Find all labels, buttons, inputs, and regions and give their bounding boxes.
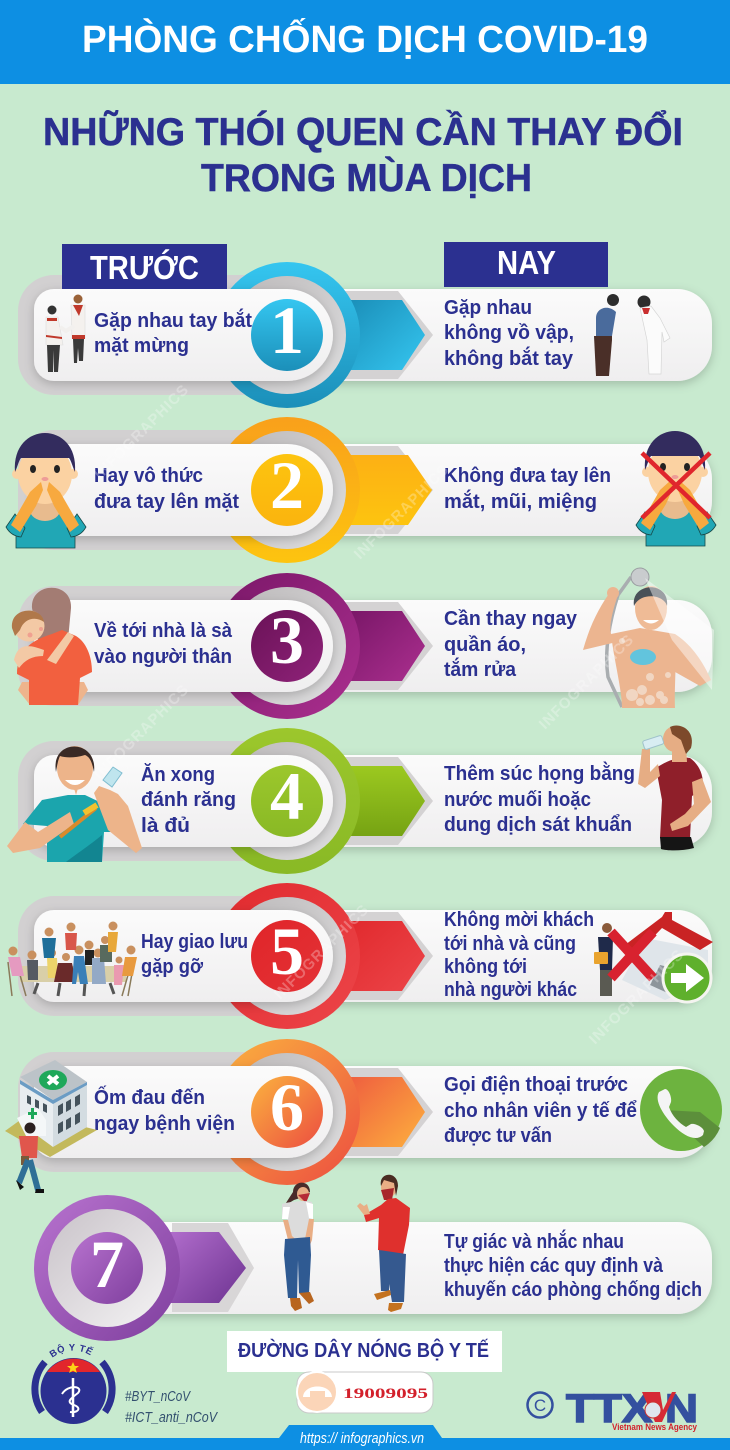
text: INFOGRAPHICS xyxy=(91,381,193,483)
text: row 1 now: không bắt tay xyxy=(444,346,574,370)
text: row 3 before: vào người thân xyxy=(94,646,232,668)
panel: row 2: 2 xyxy=(270,447,304,523)
hotline label: ĐƯỜNG DÂY NÓNG BỘ Y TẾ xyxy=(238,1338,489,1362)
text: row 1 before: mặt mừng xyxy=(94,335,189,357)
text: row 5 now: nhà người khác xyxy=(444,979,577,1001)
panel: row 7 xyxy=(34,1195,712,1341)
text: row 5 before: gặp gỡ xyxy=(141,956,204,978)
text: row 6 now: được tư vấn xyxy=(444,1125,552,1147)
logo: TTXVN: TTX N xyxy=(566,1387,698,1431)
text: row 2 now: Không đưa tay lên xyxy=(444,465,611,487)
panel: row 7: 7 xyxy=(90,1226,124,1302)
icon: man brushing teeth xyxy=(7,746,142,862)
text: row 6 now: cho nhân viên y tế để xyxy=(444,1100,637,1122)
text: row 4 now: Thêm súc họng bằng xyxy=(444,761,635,785)
panel: row 3: 3 xyxy=(270,602,304,678)
icon: crowd around a table xyxy=(8,922,137,996)
text: row 2 before: Hay vô thức xyxy=(94,465,203,487)
text: INFOGRAPHICS xyxy=(351,461,453,563)
panel: row 6: 6 xyxy=(270,1069,304,1145)
text: row 4 before xyxy=(141,763,236,837)
icon: people shaking hands xyxy=(46,294,85,372)
heading: now xyxy=(444,242,608,287)
text: row 2 now: mắt, mũi, miệng xyxy=(444,489,597,513)
text: row 5 now xyxy=(444,909,594,1001)
text: row 3 now: tắm rửa xyxy=(444,657,517,681)
title: TRONG MÙA DỊCH xyxy=(201,156,532,200)
logo: TTXVN: C xyxy=(534,1396,546,1415)
text: row 4 before: là đủ xyxy=(141,815,190,837)
text: row 6 now xyxy=(444,1074,637,1147)
icon: man showering xyxy=(583,568,714,708)
icon: touching face xyxy=(6,433,86,548)
footer: https:// infographics.vn xyxy=(300,1430,424,1447)
panel: row 3 xyxy=(18,573,712,719)
title: NHỮNG THÓI QUEN CẦN THAY ĐỔI xyxy=(43,109,683,154)
text: row 5 before: Hay giao lưu xyxy=(141,931,248,953)
text: row 6 before: Ốm đau đến xyxy=(94,1085,205,1109)
hotline number: 19009095 xyxy=(343,1386,428,1402)
text: row 3 now xyxy=(444,608,578,681)
header banner xyxy=(0,0,730,84)
text: INFOGRAPHICS xyxy=(536,631,638,733)
text: row 7: khuyến cáo phòng chống dịch xyxy=(444,1279,702,1301)
text: INFOGRAPHICS xyxy=(91,681,193,783)
panel: row 6 xyxy=(18,1039,712,1185)
text: row 5 now: không tới xyxy=(444,956,527,978)
panel: row 1 xyxy=(18,262,712,408)
text: row 4 before: Ăn xong xyxy=(141,763,215,786)
heading: before: TRƯỚC xyxy=(90,249,199,286)
panel: row 5 xyxy=(18,883,712,1029)
text: row 3 now: quần áo, xyxy=(444,634,526,656)
text: row 4 now: nước muối hoặc xyxy=(444,789,591,811)
title xyxy=(43,109,683,200)
text: row 7: thực hiện các quy định và xyxy=(444,1255,664,1277)
panel: row 4 xyxy=(18,728,712,874)
icon: people bowing xyxy=(594,294,670,376)
panel: row 1: 1 xyxy=(270,292,304,368)
text: row 2 before xyxy=(94,465,239,513)
text: row 6 now: Gọi điện thoại trước xyxy=(444,1074,628,1096)
text: row 7: Tự giác và nhắc nhau xyxy=(444,1229,624,1253)
text: row 7 xyxy=(444,1229,702,1301)
text: row 1 now: không vồ vập, xyxy=(444,322,574,344)
hotline label xyxy=(227,1331,502,1372)
text: row 4 before: đánh răng xyxy=(141,789,236,811)
hashtags xyxy=(125,1388,219,1426)
panel: row 5: 5 xyxy=(270,913,304,989)
panel: row 4: 4 xyxy=(270,758,304,834)
text: row 3 before: Về tới nhà là sà xyxy=(94,620,233,642)
logo: TTXVN xyxy=(528,1387,698,1433)
icon: touching face crossed out xyxy=(636,431,716,546)
footer xyxy=(0,1425,730,1450)
text: row 1 now: Gặp nhau xyxy=(444,297,532,319)
hotline number xyxy=(297,1372,433,1413)
text: row 1 now xyxy=(444,297,574,370)
logo: ministry of health: BỘ Y TẾ xyxy=(49,1344,94,1358)
text: row 3 now: Cần thay ngay xyxy=(444,608,578,630)
panel: row 2 xyxy=(18,417,712,563)
heading: before xyxy=(62,244,227,289)
text: row 1 before xyxy=(94,308,252,357)
text: row 3 before xyxy=(94,620,233,668)
icon: green phone xyxy=(640,1069,722,1151)
text: row 4 now: dung dịch sát khuẩn xyxy=(444,814,632,836)
text: row 2 now xyxy=(444,465,611,513)
hashtags: #ICT_anti_nCoV xyxy=(125,1409,219,1426)
text: row 2 before: đưa tay lên mặt xyxy=(94,491,239,513)
heading: now: NAY xyxy=(497,244,556,281)
text: row 1 before: Gặp nhau tay bắt xyxy=(94,308,252,332)
logo: ministry of health xyxy=(31,1344,116,1424)
text: row 6 before xyxy=(94,1085,235,1135)
icon: woman and man wearing masks xyxy=(282,1175,410,1312)
hashtags: #BYT_nCoV xyxy=(125,1388,192,1405)
icon: hugging relatives xyxy=(12,588,92,705)
text: row 4 now xyxy=(444,761,635,836)
icon: no visiting house xyxy=(594,912,713,1002)
text: row 5 before xyxy=(141,931,248,978)
text: INFOGRAPHICS xyxy=(586,946,688,1048)
header banner: PHÒNG CHỐNG DỊCH COVID-19 xyxy=(82,16,648,61)
text: INFOGRAPHICS xyxy=(271,901,373,1003)
text: row 6 before: ngay bệnh viện xyxy=(94,1113,235,1135)
text: row 5 now: Không mời khách xyxy=(444,909,594,931)
icon: man drinking water xyxy=(638,726,711,850)
logo: TTXVN: Vietnam News Agency xyxy=(612,1422,698,1433)
icon: hospital and walking person xyxy=(5,1060,97,1193)
text: row 5 now: tới nhà và cũng xyxy=(444,933,576,955)
